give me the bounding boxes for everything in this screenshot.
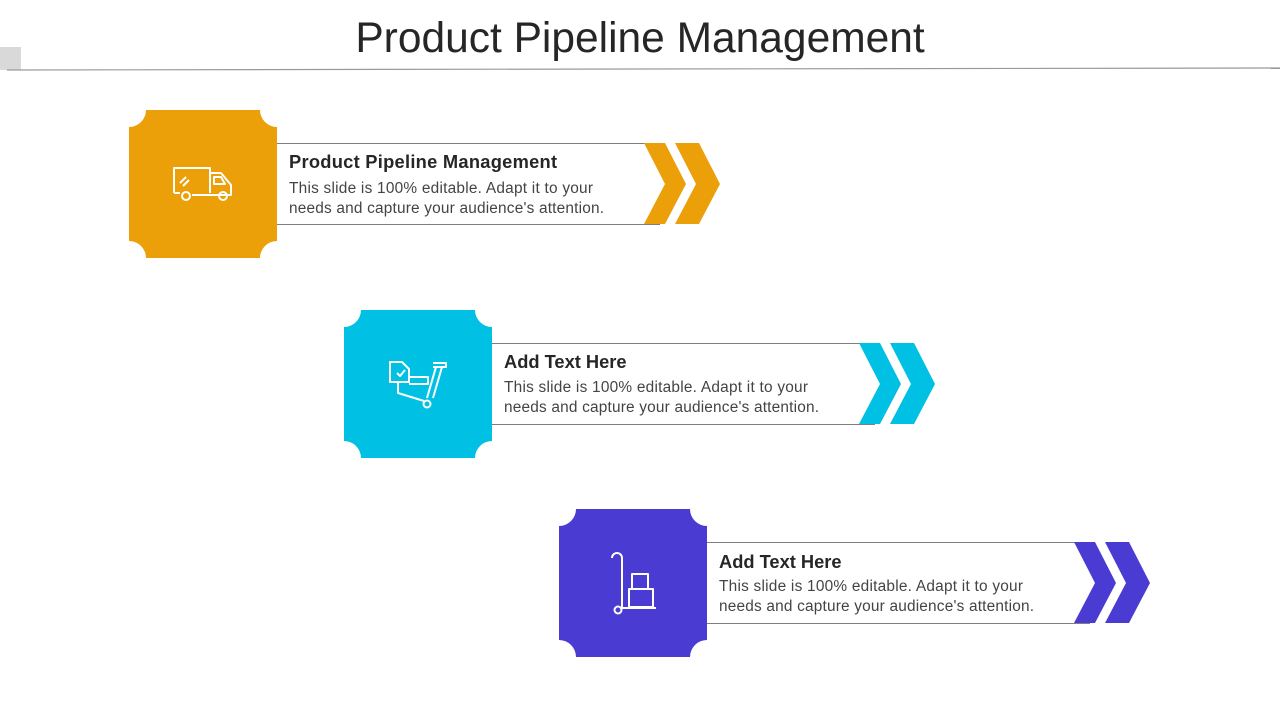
tile: orange: [129, 110, 277, 258]
body 1: needs and capture your audience's attention.: [289, 200, 604, 217]
body 3: needs and capture your audience's attention.: [719, 598, 1034, 615]
row 2: [344, 310, 935, 458]
row 1: [129, 110, 720, 258]
text box 2: [485, 344, 875, 424]
title: Product Pipeline Management: [355, 15, 925, 62]
body 3: This slide is 100% editable. Adapt it to your: [719, 578, 1023, 595]
heading 1: Product Pipeline Management: [289, 151, 557, 172]
arrow: purple chevrons: [1074, 542, 1150, 623]
heading 2: Add Text Here: [504, 351, 627, 372]
tile: cyan: [344, 310, 492, 458]
text box 1: [270, 144, 660, 224]
body 2: This slide is 100% editable. Adapt it to your: [504, 379, 808, 396]
heading 3: Add Text Here: [719, 551, 842, 572]
arrow: cyan chevrons: [859, 343, 935, 424]
icon: document trolley: [390, 362, 446, 408]
tile: purple: [559, 509, 707, 657]
text box 3: [700, 542, 1090, 624]
icon: hand truck with boxes: [612, 553, 656, 614]
body 1: This slide is 100% editable. Adapt it to your: [289, 180, 593, 197]
body 2: needs and capture your audience's attention.: [504, 399, 819, 416]
row 3: [559, 509, 1150, 657]
arrow: orange chevrons: [644, 143, 720, 224]
icon: truck: [174, 168, 231, 200]
